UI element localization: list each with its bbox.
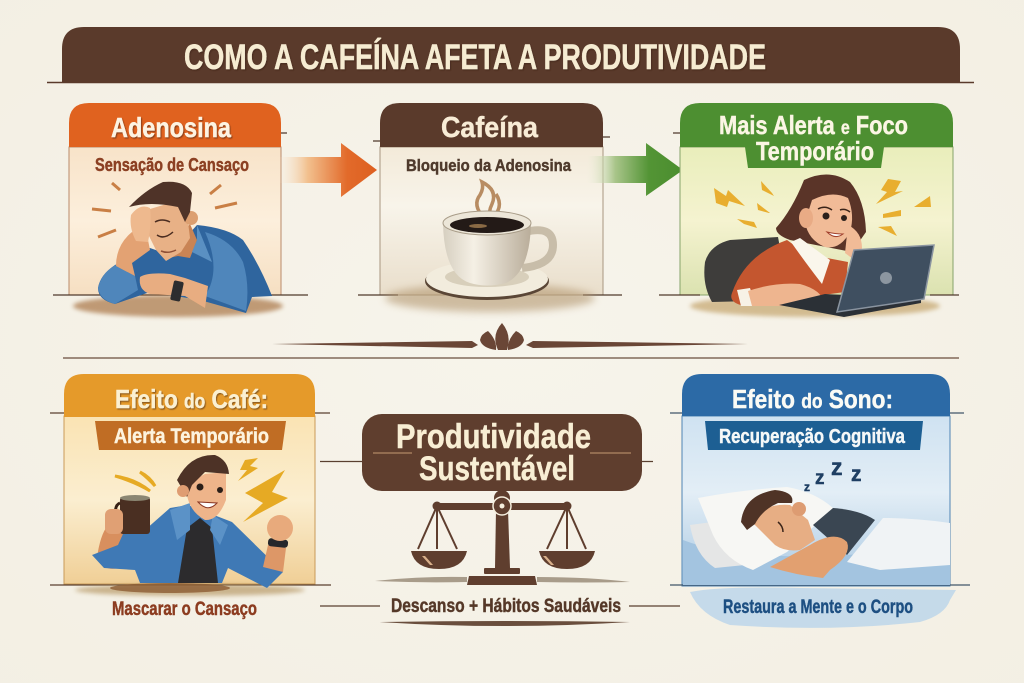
icon: sleeping z letters: z xyxy=(831,454,842,480)
panel: cafeina: Bloqueio da Adenosina xyxy=(406,156,571,175)
icon: sleeping z letters: z xyxy=(815,468,824,489)
panel: produtividade sustentavel: Descanso + Hábitos Saudáveis xyxy=(391,596,621,617)
ribbon: alerta temporario: Alerta Temporário xyxy=(114,425,269,448)
panel: produtividade sustentavel: Produtividade xyxy=(396,418,591,456)
title banner: COMO A CAFEÍNA AFETA A PRODUTIVIDADE xyxy=(184,37,766,77)
panel: produtividade sustentavel xyxy=(320,414,680,626)
icon: fatigue marks xyxy=(92,183,237,237)
arrow: adenosina to cafeina xyxy=(278,143,377,197)
panel: cafeina xyxy=(358,103,622,312)
panel: adenosina: Sensação de Cansaço xyxy=(95,155,249,175)
title banner xyxy=(47,27,974,83)
panel: efeito do sono xyxy=(670,374,970,628)
divider ornament xyxy=(272,323,748,350)
panel: efeito do sono: Efeito do Sono: xyxy=(732,384,893,414)
panel: mais alerta e foco xyxy=(659,103,959,317)
icon: sleeping z letters: z xyxy=(804,480,810,494)
panel: efeito do cafe: Efeito do Café: xyxy=(115,384,268,414)
panel: mais alerta e foco: Temporário xyxy=(756,136,874,166)
arrow: cafeina to foco xyxy=(586,143,683,196)
panel: mais alerta e foco: Mais Alerta e Foco xyxy=(719,110,908,140)
illustration: sleeping man xyxy=(683,454,950,585)
panel: efeito do sono: Restaura a Mente e o Corpo xyxy=(723,597,913,618)
illustration: happy man with mug xyxy=(92,455,293,588)
panel: cafeina: Cafeína xyxy=(441,112,539,144)
icon: balance scale xyxy=(375,490,630,585)
ribbon: recuperacao cognitiva: Recuperação Cognitiva xyxy=(719,426,906,448)
panel: produtividade sustentavel: Sustentável xyxy=(419,450,575,488)
icon: sleeping z letters: z xyxy=(851,463,862,486)
ribbon: recuperacao cognitiva xyxy=(705,421,923,450)
illustration: tired man xyxy=(98,182,272,313)
icon: sleeping z letters xyxy=(804,454,862,494)
icon: coffee cup and saucer xyxy=(425,211,553,300)
panel: efeito do cafe: Mascarar o Cansaço xyxy=(112,599,257,620)
panel: adenosina: Adenosina xyxy=(111,112,231,143)
icon: energy bolts xyxy=(714,179,931,236)
icon: lightning bolts xyxy=(238,458,288,522)
icon: motion marks xyxy=(115,472,155,491)
icon: steam xyxy=(477,182,499,220)
ribbon: alerta temporario xyxy=(95,421,286,450)
illustration: woman with laptop xyxy=(704,174,934,317)
panel: efeito do cafe xyxy=(50,374,331,620)
panel: adenosina xyxy=(53,103,308,317)
